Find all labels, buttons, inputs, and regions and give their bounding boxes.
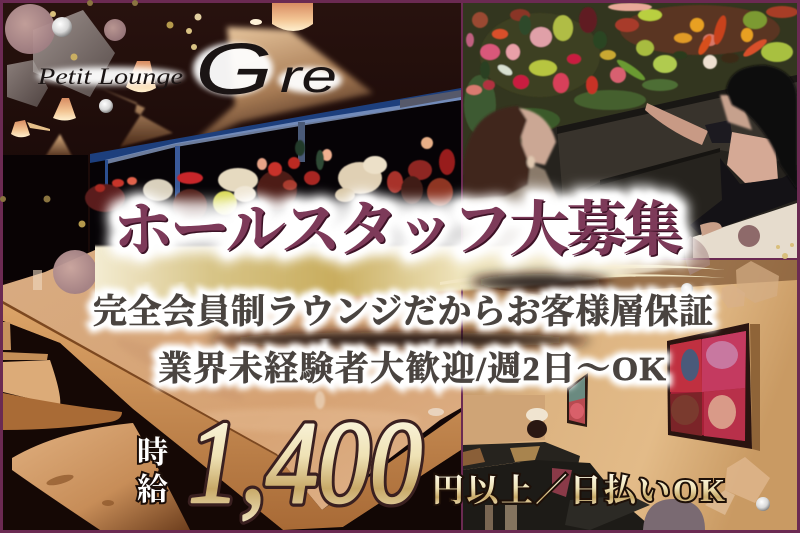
heading: ホールスタッフ大募集: ホールスタッフ大募集	[113, 197, 683, 263]
bar stools	[3, 352, 190, 530]
flower wall	[464, 3, 798, 135]
large painting	[667, 323, 760, 451]
vase of orchids	[526, 408, 548, 438]
bar counter top	[3, 250, 461, 510]
marble ledge	[693, 203, 797, 258]
subheading: newcomers welcome: 業界未経験者大歓迎/週2日～OK	[158, 350, 667, 388]
dark smears behind copy	[210, 274, 610, 348]
leather sofa	[463, 442, 655, 530]
wage: 1,400: 1,400	[188, 397, 422, 528]
photo: women arranging flowers	[463, 3, 798, 258]
subheading: membership lounge: 完全会員制ラウンジだからお客様層保証	[93, 293, 713, 331]
label: 時給: 時	[137, 435, 168, 470]
logo: Petit Lounge Gre: Petit Lounge	[37, 64, 183, 89]
pendant lamps	[11, 3, 313, 137]
label: 時給: 給	[137, 472, 168, 507]
woman in black dress	[645, 65, 797, 236]
subheading: newcomers welcome: 業界未経験者大歓迎/週2日～OK	[158, 350, 667, 388]
photo: lounge ceiling and marble bar counter	[3, 3, 461, 530]
wage note: 円以上／日払いOK: 円以上／日払いOK	[432, 472, 725, 508]
swoosh lines	[440, 265, 725, 288]
logo: Petit Lounge Gre: re	[280, 50, 337, 102]
logo: Petit Lounge Gre: G	[195, 30, 273, 110]
heading: ホールスタッフ大募集: ホールスタッフ大募集	[114, 198, 684, 264]
woman facing away, blurred	[463, 106, 558, 245]
heading: ホールスタッフ大募集: ホールスタッフ大募集	[113, 197, 683, 263]
heading: ホールスタッフ大募集: ホールスタッフ大募集	[113, 197, 683, 263]
subheading: membership lounge: 完全会員制ラウンジだからお客様層保証	[93, 293, 713, 331]
logo glow	[36, 43, 342, 95]
flower arrangements	[85, 137, 455, 221]
subheading: membership lounge: 完全会員制ラウンジだからお客様層保証	[93, 293, 713, 331]
photo: private room with sofa and paintings	[463, 260, 797, 530]
logo: Petit Lounge Gre	[37, 30, 337, 110]
gold swoosh band	[85, 246, 710, 306]
label: 時給	[137, 435, 168, 507]
small painting	[567, 373, 588, 427]
subheading: newcomers welcome: 業界未経験者大歓迎/週2日～OK	[158, 350, 667, 388]
planter	[558, 82, 797, 194]
wage: 1,400: 1,400	[188, 397, 422, 528]
